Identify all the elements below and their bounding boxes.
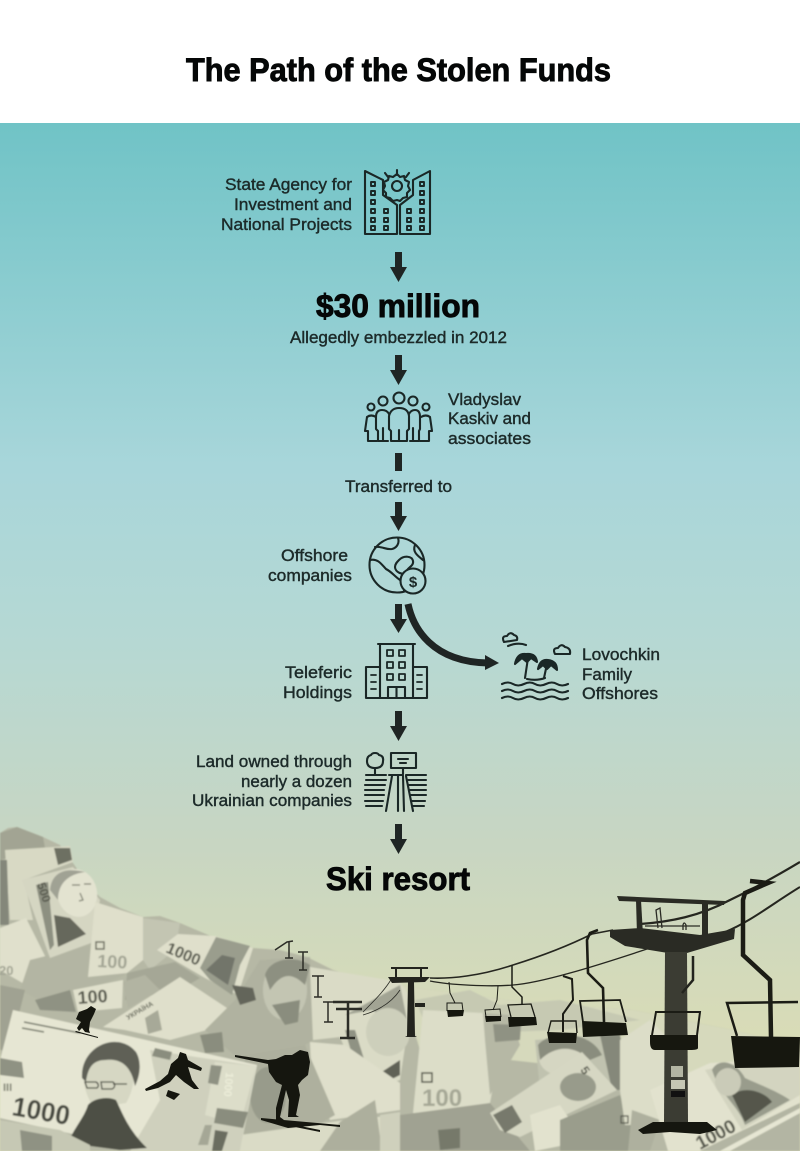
note strip bottom left <box>0 1120 90 1151</box>
portrait on main note <box>83 1050 134 1108</box>
chair: third <box>580 930 628 1037</box>
pale 100 note <box>88 902 143 977</box>
chair: sixth <box>485 986 501 1022</box>
ski lift: small tower <box>388 967 430 1037</box>
amount heading: $30 million <box>316 288 480 324</box>
transfer label: Transferred to <box>345 478 452 496</box>
collage: banknote mountain: 5 <box>578 1064 593 1077</box>
collage: banknote mountain: 100 <box>77 986 108 1008</box>
ski lift: main tower <box>610 896 735 1134</box>
connector bar <box>395 453 402 471</box>
icon: agency buildings and gear <box>365 170 430 234</box>
agency label: Investment and <box>234 196 352 214</box>
offshore label <box>268 547 352 585</box>
icon: land plot with tree and sign <box>365 753 426 811</box>
1000 strip note <box>157 934 253 995</box>
skier: large <box>235 1050 340 1132</box>
chair: seventh <box>447 982 464 1017</box>
holdings label <box>283 664 352 702</box>
top left torn note <box>0 827 45 860</box>
Ukraine note <box>103 977 230 1040</box>
land label: Land owned through <box>196 753 352 771</box>
collage: banknote mountain <box>0 827 800 1151</box>
amount subtitle: Allegedly embezzled in 2012 <box>290 329 507 347</box>
pale note bottom center <box>310 1042 400 1120</box>
offshore label: companies <box>268 567 352 585</box>
center portrait <box>535 1035 612 1100</box>
mid tones left <box>20 945 125 1010</box>
associates label: Kaskiv and <box>448 410 531 428</box>
associates label <box>448 391 531 448</box>
icon: palm island <box>502 633 570 700</box>
ski lift: distant towers <box>275 941 400 1038</box>
agency label: State Agency for <box>225 176 353 194</box>
skier: medium <box>145 1052 202 1100</box>
arrow: offshore to holdings <box>390 604 407 633</box>
Lovochkin label: Family <box>582 666 633 684</box>
arrow: holdings to land <box>390 711 407 741</box>
icon: group of people <box>365 392 432 441</box>
skier: small <box>75 1006 98 1038</box>
associates label: Vladyslav <box>448 391 522 409</box>
collage: banknote mountain: 500 <box>34 881 54 904</box>
lower-right 1000 note <box>650 1058 800 1151</box>
Lovochkin label: Offshores <box>582 685 658 703</box>
resort heading: Ski resort <box>326 861 470 897</box>
collage: banknote mountain: 1000 <box>163 940 203 970</box>
diagonal note <box>490 1052 617 1137</box>
collage: banknote mountain: 1000 <box>221 1072 235 1097</box>
agency label <box>221 176 353 234</box>
land label <box>192 753 352 810</box>
chair: fifth <box>508 965 537 1027</box>
100 note <box>73 980 123 1012</box>
lower right small notes <box>400 1103 530 1151</box>
chair: behind tower <box>650 956 700 1050</box>
chair: fourth <box>547 976 577 1043</box>
grey portrait note center <box>205 957 313 1060</box>
light note left <box>0 918 46 985</box>
main 1000 note <box>0 1010 257 1151</box>
collage: banknote mountain: 1000 <box>10 1091 72 1131</box>
chair lifts <box>447 881 800 1068</box>
chair: large right <box>727 881 800 1068</box>
offshore label: Offshore <box>281 547 348 565</box>
arrow: amount to associates <box>390 355 407 385</box>
collage: banknote mountain: УКРАЇНА <box>125 1000 155 1022</box>
icon: office building <box>366 644 427 698</box>
icon: globe with dollar coin: $ <box>409 574 418 591</box>
collage: banknote mountain: III <box>3 1082 12 1094</box>
curved arrow: to Lovochkin offshores <box>408 604 499 670</box>
far pale slope, right <box>400 985 800 1090</box>
Lovochkin label <box>582 646 660 703</box>
collage: banknote mountain: 100 <box>422 1085 462 1112</box>
holdings label: Teleferic <box>285 664 352 682</box>
arrow: from agency to amount <box>390 252 407 282</box>
ski lift: cables <box>430 862 800 986</box>
mountain silhouette base <box>0 827 800 1151</box>
associates label: associates <box>448 430 531 448</box>
right-hand portrait note (center-right) <box>310 967 412 1092</box>
icon: globe with dollar coin <box>370 538 426 594</box>
arrow: land to resort <box>390 824 407 854</box>
title: The Path of the Stolen Funds <box>186 52 611 88</box>
land label: Ukrainian companies <box>192 792 352 810</box>
holdings label: Holdings <box>283 684 352 702</box>
arrow: transfer to offshore <box>390 502 407 531</box>
agency label: National Projects <box>221 216 352 234</box>
portrait note top left <box>22 867 100 958</box>
collage: banknote mountain: 100 <box>97 951 128 973</box>
Lovochkin label: Lovochkin <box>582 646 660 664</box>
land label: nearly a dozen <box>241 773 352 791</box>
right section: pale 100 note <box>413 1010 500 1120</box>
